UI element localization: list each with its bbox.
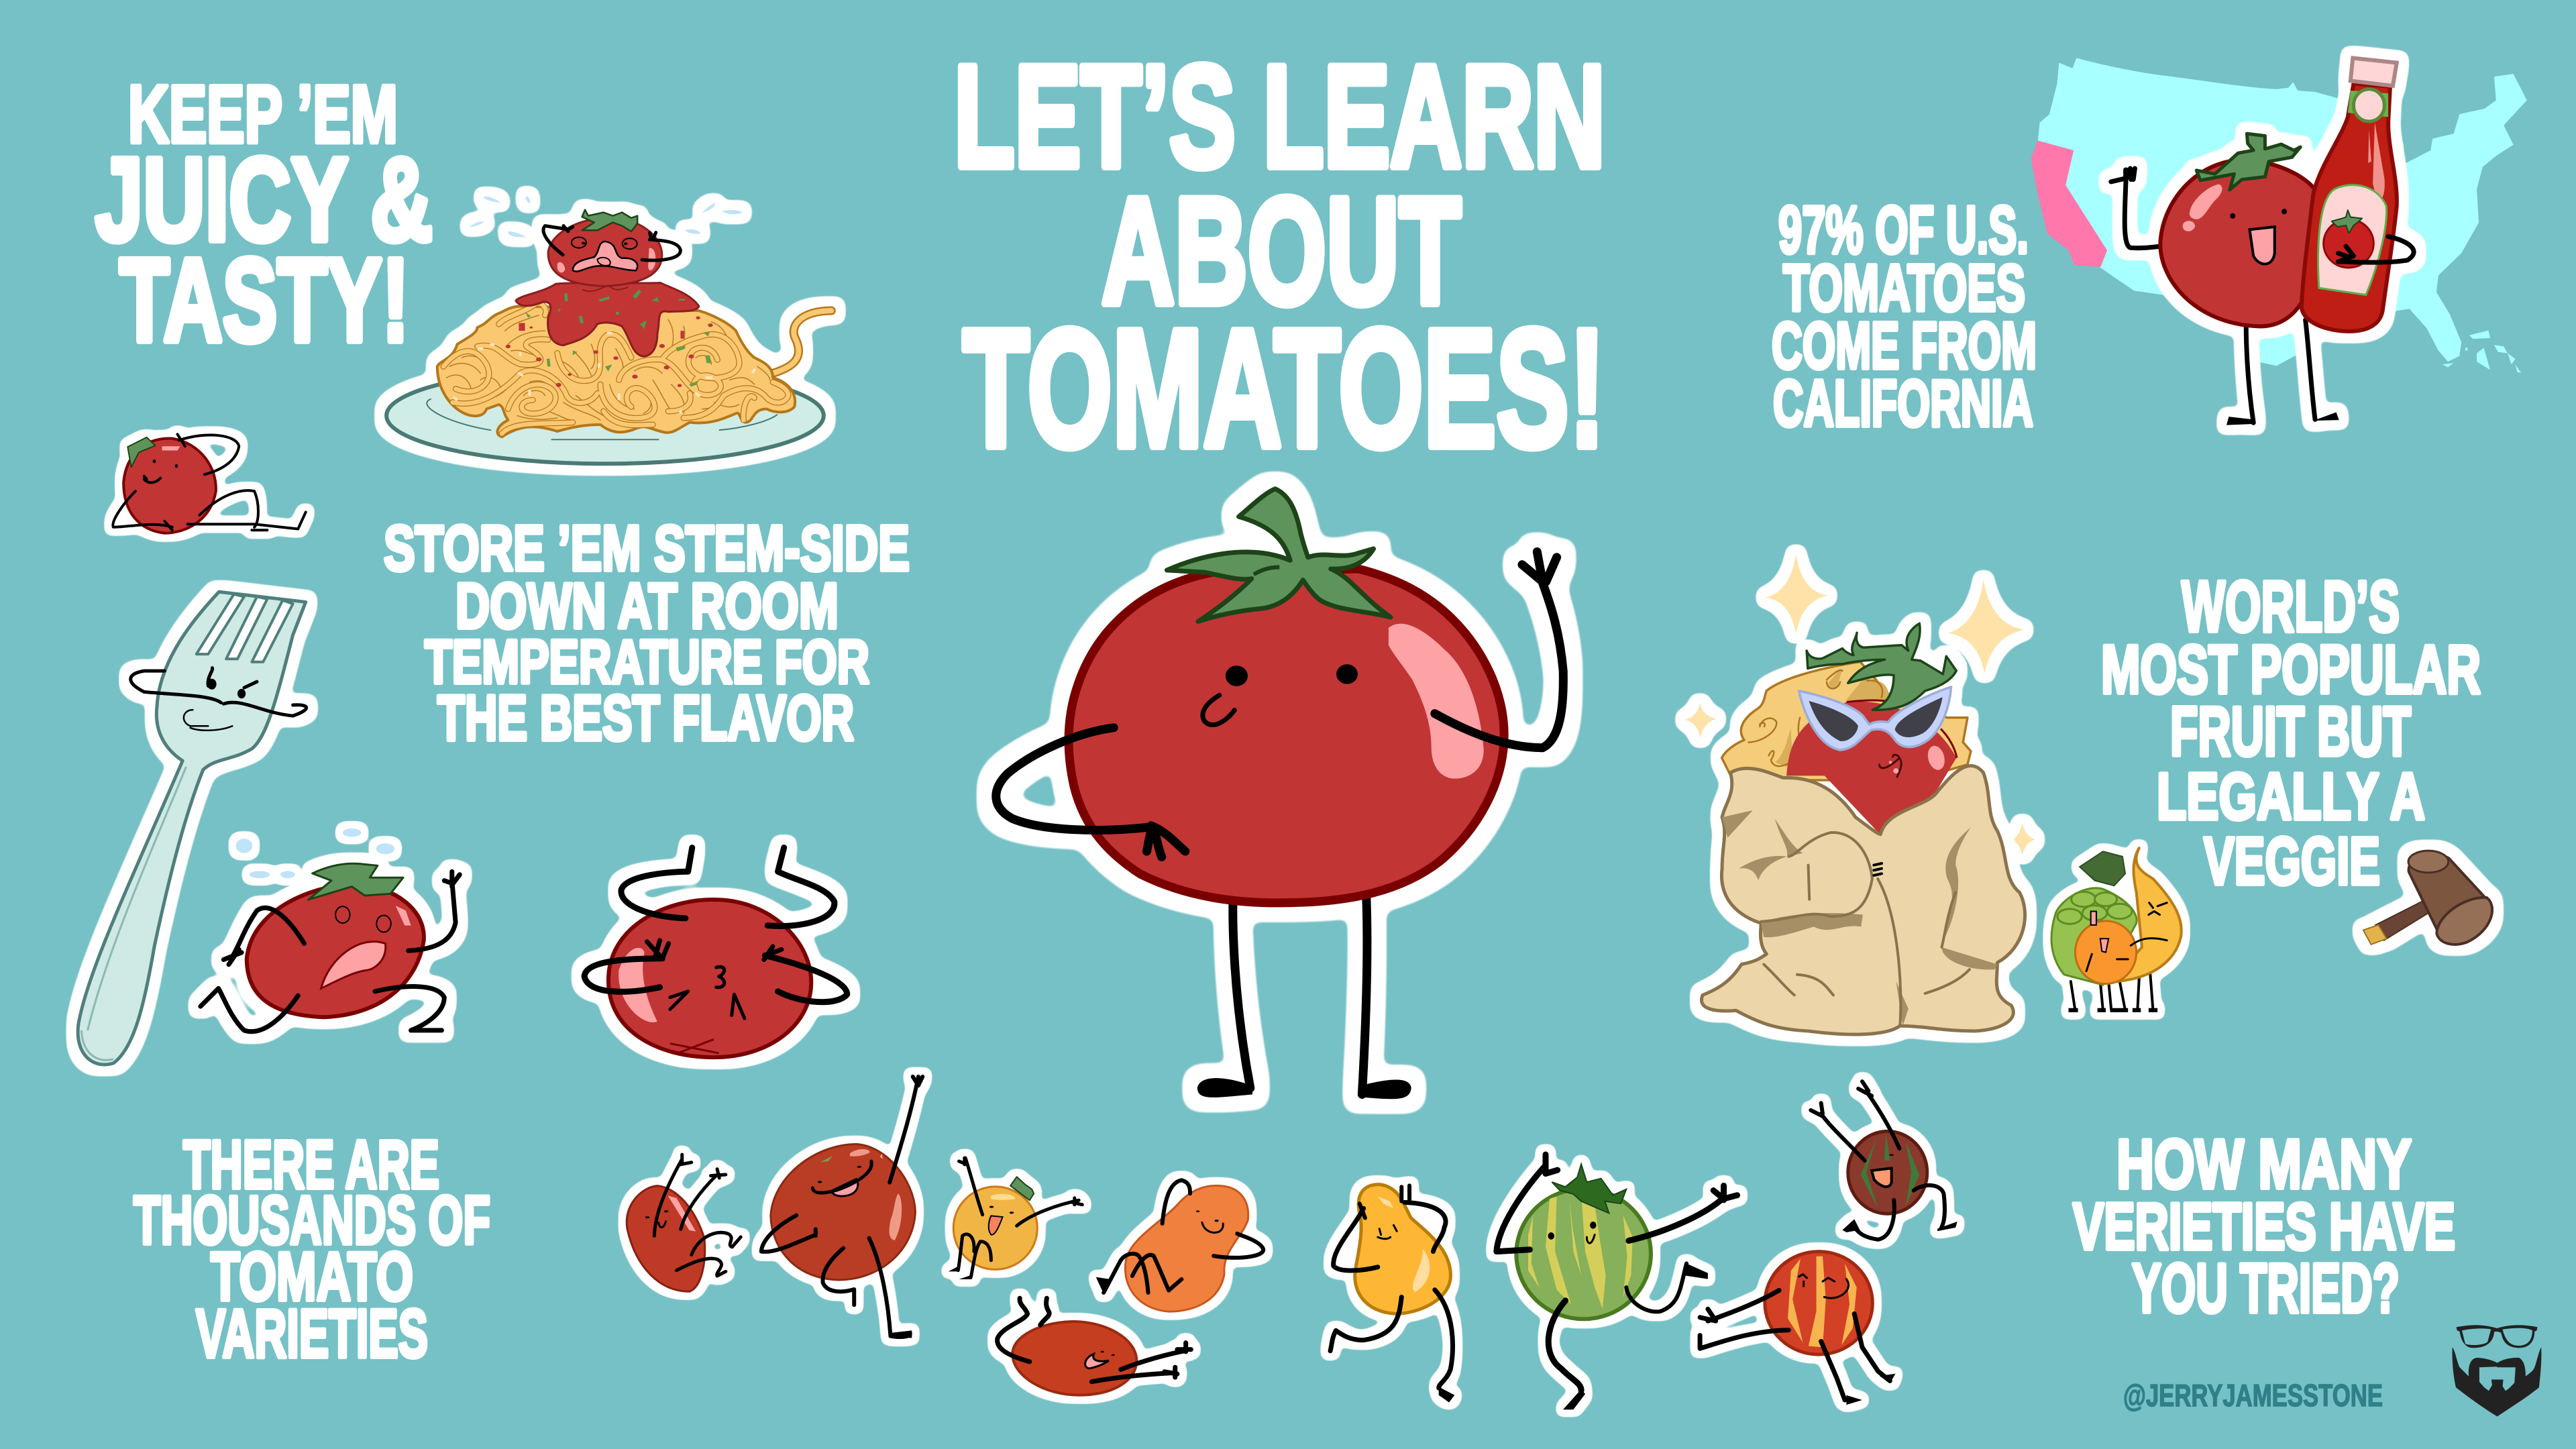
face [184,668,257,731]
fork handle shading [81,767,186,1060]
sauce [516,283,699,356]
text: california fact: COME FROM [1772,309,2037,382]
character: main waving tomato [996,489,1563,1099]
bottle label [2318,185,2387,295]
stripes [1528,1194,1633,1309]
calyx inner fold [1254,567,1279,574]
neck label [2348,91,2388,117]
limbs [1700,1290,1890,1400]
face [1799,1275,1849,1298]
noodle highlights [454,333,755,413]
bottle cap [2351,58,2397,86]
character: running scared tomato [201,863,460,1032]
text: storage tip: THE BEST FLAVOR [437,682,854,754]
calyx [2196,133,2300,190]
fork [78,592,306,1065]
small faces [2086,903,2167,971]
sauce herbs [557,290,685,329]
title: LET’S LEARN [954,35,1605,197]
eyes [153,460,178,468]
character: orange-red tomato on its back [998,1298,1191,1395]
text: keep em juicy and tasty: KEEP ’EM [128,68,398,160]
moustache arms [131,671,307,716]
character: brown striped tomato [1811,1081,1957,1240]
character group: grapes, orange and banana [2051,848,2182,1012]
highlight [1389,624,1484,779]
face [670,967,745,1018]
sunglasses [1799,687,1951,750]
text: most popular fruit [2101,566,2481,899]
body [247,883,424,1017]
body [608,900,811,1057]
calyx [582,210,637,231]
text: storage tip: STORE ’EM STEM-SIDE [384,513,910,584]
face [144,476,160,482]
leaves [1807,623,1956,710]
coat shadows [1722,810,1997,1026]
map: California highlight [2031,141,2107,267]
limbs [113,434,306,530]
face [1203,664,1358,724]
coat folds [1761,833,1970,1026]
text: most popular fruit: VEGGIE [2204,824,2380,899]
face [2230,209,2287,264]
text: california fact: 97% OF U.S. [1778,193,2029,268]
arms [543,226,680,260]
title [954,35,1605,482]
highlight [1925,744,1947,772]
text: california fact [1772,193,2037,440]
arm: waving left arm [2111,168,2186,248]
bottle highlight [2368,123,2385,199]
text: california fact: TOMATOES [1783,251,2025,325]
text: keep em juicy and tasty [95,68,433,366]
text: most popular fruit: WORLD’S [2182,566,2400,647]
face [321,906,391,988]
text: thousands of varieties: THERE ARE [183,1126,439,1203]
legs [1233,861,1367,1094]
coat buttons [1874,863,1882,875]
illustration: fork character [78,592,307,1065]
fine noodle lines [447,315,770,420]
character: red and gold striped tomato [1700,1252,1896,1405]
banana [2114,848,2182,981]
leaf [2080,851,2125,885]
tomato body [2160,160,2322,326]
label tomato [2324,219,2373,268]
calyx [309,863,403,900]
text: thousands of varieties [133,1126,490,1372]
illustration: water droplets over spaghetti tomato [470,196,742,237]
fork tine slots [197,594,293,662]
limbs [201,871,460,1032]
left arm on hip [996,728,1185,857]
illustration: gavel [2363,851,2492,945]
text: keep em juicy and tasty: TASTY! [119,235,409,366]
text: social handle: @JERRYJAMESSTONE [2123,1378,2383,1413]
illustration: USA map with California [2031,58,2527,373]
right arm waving [1435,551,1563,748]
character: orange kidney tomato [1096,1180,1263,1311]
illustration: plate of spaghetti with tomato [386,210,831,464]
character: hiding tomato [584,848,847,1057]
text: thousands of varieties: VARIETIES [196,1295,428,1372]
plate [386,368,824,464]
fur coat [1701,765,2025,1034]
face [1548,1222,1597,1243]
limbs [1497,1155,1737,1391]
character: big brown-red tomato [761,1077,922,1338]
feet [1197,1078,1411,1099]
text: thousands of varieties: TOMATO [211,1238,413,1315]
right arm hugging bottle [2338,237,2414,262]
text: storage tip: TEMPERATURE FOR [425,628,869,696]
title: ABOUT [1102,166,1461,335]
gavel head [2409,854,2487,941]
text: california fact: CALIFORNIA [1773,366,2033,440]
hair [1722,662,1971,780]
mouth [1879,755,1901,777]
sauce fold [582,286,628,291]
face [572,237,637,272]
arms and legs [584,848,847,1002]
text: storage tip [384,513,910,754]
text: storage tip: DOWN AT ROOM [455,570,839,642]
text: most popular fruit: LEGALLY A [2157,759,2425,833]
calyx [1167,489,1391,621]
grapes [2051,888,2137,985]
legs [2246,303,2315,423]
tomato head [1786,702,1956,836]
stem scar [670,1039,719,1053]
leg lines [2071,975,2153,1010]
highlight [619,948,657,1022]
text: how many varieties: YOU TRIED? [2132,1250,2400,1328]
body [123,439,216,533]
ketchup bottle [2302,84,2397,331]
calyx [1552,1164,1626,1213]
head detail layer [1722,623,1971,836]
tomato body [1069,569,1504,903]
tomato head [548,218,662,286]
logo: bearded man with glasses [2453,1325,2541,1417]
calyx [127,437,156,467]
character: tomato holding ketchup bottle [2111,58,2414,425]
character: lying tomato [113,434,306,533]
character: red plum tomato [627,1155,741,1291]
text: how many varieties [2073,1126,2455,1328]
title: TOMATOES! [963,294,1605,482]
thick noodle strands [443,304,788,433]
character: diva tomato in fur coat with sunglasses [1701,623,2025,1034]
text: keep em juicy and tasty: JUICY & [95,134,433,266]
text: thousands of varieties: THOUSANDS OF [133,1182,490,1258]
highlights [557,248,655,272]
feet [2226,413,2339,425]
character: pear-shaped yellow tomato [1330,1185,1454,1403]
character: diva tomato sparkles [1685,554,2035,855]
gavel handle [2375,901,2434,941]
noodle tail [773,311,831,373]
text: most popular fruit: FRUIT BUT [2170,693,2411,771]
illustration: sweat drops over running tomato [236,828,394,878]
orange [2075,921,2137,984]
character: yellow tomato [949,1158,1082,1279]
herbs and tomato bits [506,312,713,387]
highlight [2183,184,2222,231]
character: green striped tomato [1497,1155,1737,1409]
text: how many varieties: HOW MANY [2116,1126,2412,1203]
pasta mound [437,306,795,437]
